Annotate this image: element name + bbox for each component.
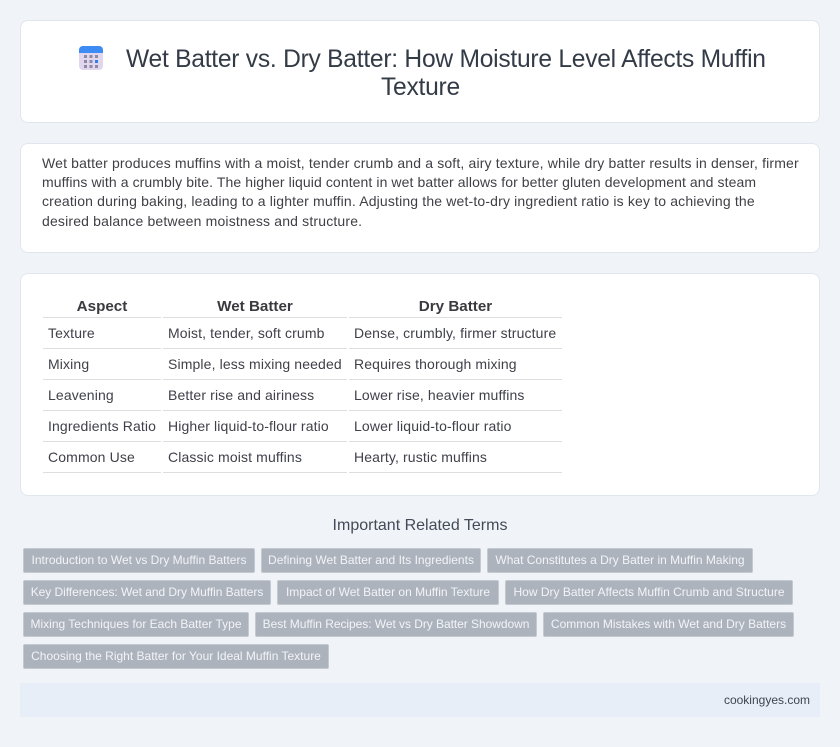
- summary text: creation during baking, leading to a lighter muffin. Adjusting the wet-to-dry ingredient ratio is key to achieving the: [42, 193, 755, 209]
- panel: comparison table: [20, 273, 820, 496]
- comparison table: Moist, tender, soft crumb: [168, 325, 325, 341]
- comparison table: Dense, crumbly, firmer structure: [354, 325, 556, 341]
- header card: [20, 20, 820, 123]
- comparison table: Dry Batter: [419, 298, 492, 314]
- footer source: cookingyes.com: [724, 693, 810, 707]
- summary text: [42, 155, 799, 229]
- comparison table: Simple, less mixing needed: [168, 356, 342, 372]
- comparison table: Aspect: [77, 298, 127, 314]
- related terms tags: Impact of Wet Batter on Muffin Texture: [286, 585, 490, 599]
- related terms tags: Choosing the Right Batter for Your Ideal Muffin Texture: [31, 649, 321, 663]
- related terms tags: Common Mistakes with Wet and Dry Batters: [551, 617, 786, 631]
- summary text: muffins with a crumbly bite. The higher liquid content in wet batter allows for better gluten development and steam: [42, 174, 756, 190]
- comparison table: Common Use: [48, 449, 135, 465]
- summary text: desired balance between moistness and structure.: [42, 213, 362, 229]
- comparison table: Texture: [48, 325, 95, 341]
- related terms tags: How Dry Batter Affects Muffin Crumb and Structure: [514, 585, 784, 599]
- footer: [20, 683, 820, 717]
- comparison table: Requires thorough mixing: [354, 356, 517, 372]
- comparison table: Hearty, rustic muffins: [354, 449, 487, 465]
- title: Wet Batter vs. Dry Batter: How Moisture Level Affects Muffin: [126, 46, 766, 73]
- related terms tags: Defining Wet Batter and Its Ingredients: [268, 553, 474, 567]
- comparison table: Ingredients Ratio: [48, 418, 156, 434]
- related terms tags: What Constitutes a Dry Batter in Muffin Making: [495, 553, 745, 567]
- title: Texture: [381, 74, 460, 101]
- comparison table: Wet Batter: [217, 298, 293, 314]
- related terms tags: [23, 548, 794, 669]
- panel: summary: [20, 143, 820, 253]
- comparison table: Lower rise, heavier muffins: [354, 387, 525, 403]
- comparison table: Classic moist muffins: [168, 449, 302, 465]
- summary text: Wet batter produces muffins with a moist, tender crumb and a soft, airy texture, while dry batter results in denser, firmer: [42, 155, 799, 171]
- related terms heading: Important Related Terms: [333, 517, 507, 534]
- comparison table: Leavening: [48, 387, 114, 403]
- related terms tags: Best Muffin Recipes: Wet vs Dry Batter Showdown: [263, 617, 529, 631]
- comparison table: [43, 298, 562, 473]
- related terms tags: Key Differences: Wet and Dry Muffin Batters: [31, 585, 263, 599]
- related terms tags: Introduction to Wet vs Dry Muffin Batters: [32, 553, 246, 567]
- related terms tags: Mixing Techniques for Each Batter Type: [30, 617, 242, 631]
- comparison table: Better rise and airiness: [168, 387, 314, 403]
- icon: calendar: [79, 46, 103, 70]
- title: [126, 46, 766, 101]
- comparison table: Lower liquid-to-flour ratio: [354, 418, 512, 434]
- comparison table: Mixing: [48, 356, 89, 372]
- comparison table: Higher liquid-to-flour ratio: [168, 418, 329, 434]
